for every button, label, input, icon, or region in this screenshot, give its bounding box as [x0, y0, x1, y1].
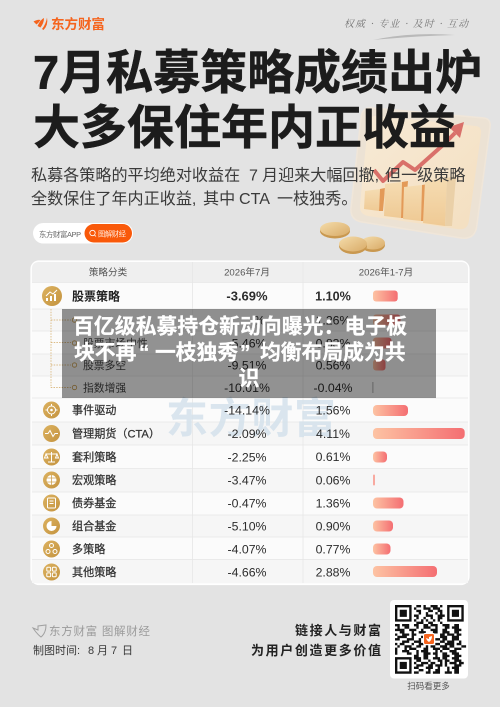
row: event driven: -14.14% [224, 404, 270, 418]
headline overlay banner: 识 [239, 368, 260, 390]
subtitle: 其中 [203, 190, 235, 208]
row: multi-strategy: 0.77% [316, 542, 350, 556]
subtitle: CTA [239, 190, 270, 208]
row: event driven: 1.56% [316, 404, 350, 418]
QR centre logo [423, 633, 435, 645]
footer brand: 月 [97, 645, 108, 657]
row: event driven: 事件驱动 [72, 403, 116, 417]
row: index enhanced: 指数增强 [83, 380, 126, 394]
row: long equity: 0.56% [316, 358, 350, 372]
row: bond funds: 债券基金 [72, 496, 116, 510]
subtitle: 月迎来大幅回撤, [262, 166, 379, 184]
connector tree [51, 309, 71, 388]
headline overlay banner [62, 309, 436, 398]
row: market neutral: 0.83% [316, 336, 350, 350]
tagline: 权威 · 专业 · 及时 · 互动 [344, 16, 469, 30]
app pill button [33, 223, 133, 244]
footer brand: 东方财富 图解财经 [49, 624, 150, 638]
row: fund of funds: 0.90% [316, 520, 350, 534]
headline overlay banner: 百亿级私募持仓新动向曝光：电子板 [73, 314, 407, 338]
QR caption: 扫码看更多 [407, 681, 450, 691]
subtitle: 但一级策略 [385, 166, 465, 184]
row: index enhanced: -10.01% [224, 381, 270, 395]
row: other strategies: -4.66% [228, 566, 267, 580]
row: other strategies: 2.88% [316, 566, 350, 580]
subtitle: 一枝独秀。 [277, 190, 357, 208]
footer brand [33, 624, 150, 657]
row: fund of funds: 组合基金 [72, 519, 116, 533]
headline overlay banner: 均衡布局成为共 [260, 340, 406, 364]
illustration: glass card with rising chart and coins [320, 108, 490, 254]
row: arbitrage: 套利策略 [72, 450, 116, 464]
row: equity strategy [42, 286, 398, 306]
row: bond funds [43, 494, 404, 512]
row: multi-strategy: 多策略 [72, 542, 105, 556]
row: index enhanced: -0.04% [314, 381, 353, 395]
table header: 2026年1-7月 [359, 266, 413, 278]
row: other strategies: 其他策略 [72, 565, 116, 579]
app pill button: 图解财经 [98, 230, 127, 238]
QR code [390, 600, 468, 678]
title: 7月私募策略成绩出炉 [33, 46, 482, 99]
title [33, 46, 482, 154]
footer brand: 日 [122, 645, 133, 657]
row: multi-strategy: -4.07% [228, 542, 267, 556]
row: arbitrage [43, 448, 387, 466]
row: equity strategy: -3.69% [226, 288, 268, 304]
subtitle [31, 166, 465, 208]
table header [89, 266, 413, 278]
footer slogan [251, 623, 381, 658]
row: arbitrage: 0.61% [316, 450, 350, 464]
row: bond funds: -0.47% [228, 496, 267, 510]
row: event driven [43, 402, 408, 418]
row: long equity: 股票多空 [83, 358, 126, 372]
headline overlay banner: “ [139, 342, 149, 364]
row: market neutral: 股票市场中性 [83, 336, 148, 350]
row: managed futures CTA [43, 425, 465, 442]
row: equity sub-strategy 1 (name and July value obscured in the reference): % [254, 314, 265, 328]
row: equity strategy: 股票策略 [72, 288, 120, 304]
row: macro: -3.47% [228, 474, 267, 488]
row: equity sub-strategy 1 (name and July value obscured in the reference): 1.26% [316, 314, 350, 328]
row: fund of funds [43, 518, 393, 534]
app pill button: 东方财富APP [39, 230, 81, 239]
row: managed futures CTA: 4.11% [316, 427, 350, 441]
footer brand: 7 [111, 645, 117, 657]
headline overlay banner: 一枝独秀 [155, 342, 238, 364]
panel: strategy table [31, 261, 469, 584]
row: managed futures CTA: -2.09% [228, 427, 267, 441]
subtitle: 全数保住了年内正收益, [31, 190, 196, 208]
row: market neutral [72, 336, 392, 350]
title: 大多保住年内正收益 [33, 101, 456, 154]
row: fund of funds: -5.10% [228, 520, 267, 534]
logo: Eastmoney: 东方财富 [51, 16, 105, 32]
footer brand: 8 [88, 645, 94, 657]
footer slogan: 为用户创造更多价值 [251, 643, 381, 658]
row: market neutral: -5.46% [228, 336, 267, 350]
subtitle: 私募各策略的平均绝对收益在 [31, 166, 240, 184]
row: other strategies [43, 564, 437, 580]
table card [31, 261, 469, 584]
headline overlay banner: 块不再 [74, 342, 137, 364]
footer brand: 制图时间: [33, 644, 80, 657]
row: index enhanced [72, 380, 373, 395]
row: managed futures CTA: 管理期货（CTA） [72, 426, 160, 440]
footer slogan: 链接人与财富 [295, 623, 381, 638]
row: multi-strategy [43, 540, 390, 558]
row: equity sub-strategy 1 (name and July value obscured in the reference) [72, 314, 401, 328]
watermark: 东方财富 [166, 395, 336, 442]
row: long equity [72, 358, 386, 372]
subtitle: 7 [249, 166, 258, 184]
row: bond funds: 1.36% [316, 496, 350, 510]
tagline [344, 16, 469, 40]
row: equity strategy: 1.10% [315, 290, 351, 304]
row: macro [43, 472, 375, 488]
headline overlay banner: ” [240, 342, 250, 364]
row: macro: 0.06% [316, 474, 350, 488]
row: arbitrage: -2.25% [228, 450, 267, 464]
table header: 策略分类 [89, 266, 128, 278]
row: long equity: -9.51% [228, 358, 267, 372]
table header: 2026年7月 [224, 266, 270, 278]
row: macro: 宏观策略 [72, 473, 116, 487]
